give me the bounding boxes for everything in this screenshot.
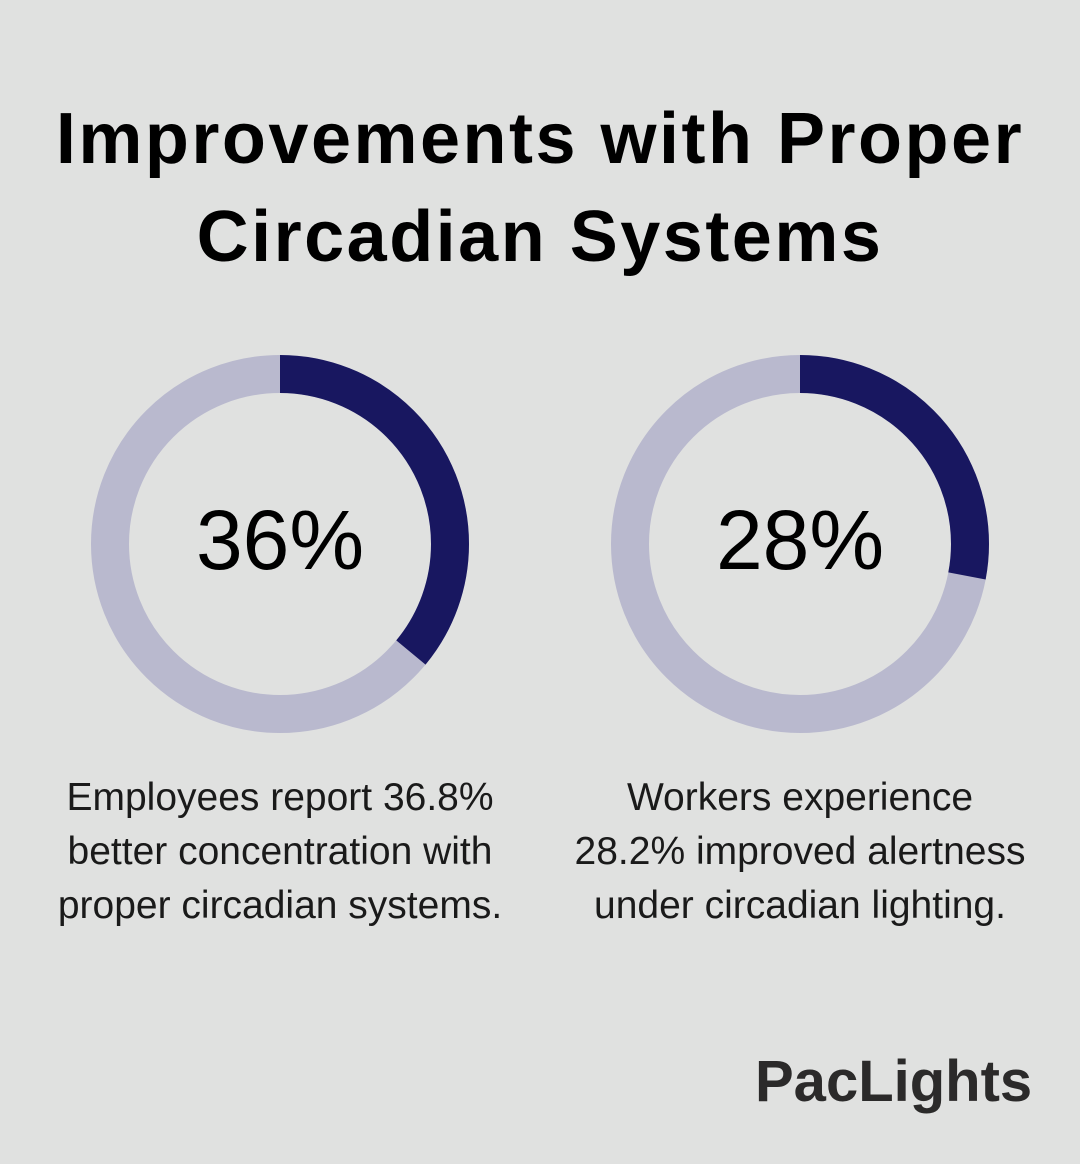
title: Circadian Systems [197, 197, 883, 277]
panel: 36% donut [91, 355, 469, 733]
value 28%: 28% [716, 493, 884, 587]
text: concentration description: better concentration with [68, 830, 492, 873]
text: alertness description [575, 776, 1025, 927]
text: alertness description: under circadian lighting. [594, 884, 1006, 927]
text: concentration description [58, 776, 502, 927]
text: alertness description: 28.2% improved alertness [575, 830, 1025, 873]
logo: PacLights [755, 1049, 1032, 1114]
donut chart 28% [611, 355, 989, 733]
title [56, 99, 1024, 277]
text: alertness description: Workers experience [627, 776, 973, 819]
text: concentration description: proper circadian systems. [58, 884, 502, 927]
title: Improvements with Proper [56, 99, 1024, 179]
text: concentration description: Employees report 36.8% [66, 776, 494, 819]
value 36%: 36% [196, 493, 364, 587]
donut chart 36% [91, 355, 469, 733]
panel: 28% donut [611, 355, 989, 733]
